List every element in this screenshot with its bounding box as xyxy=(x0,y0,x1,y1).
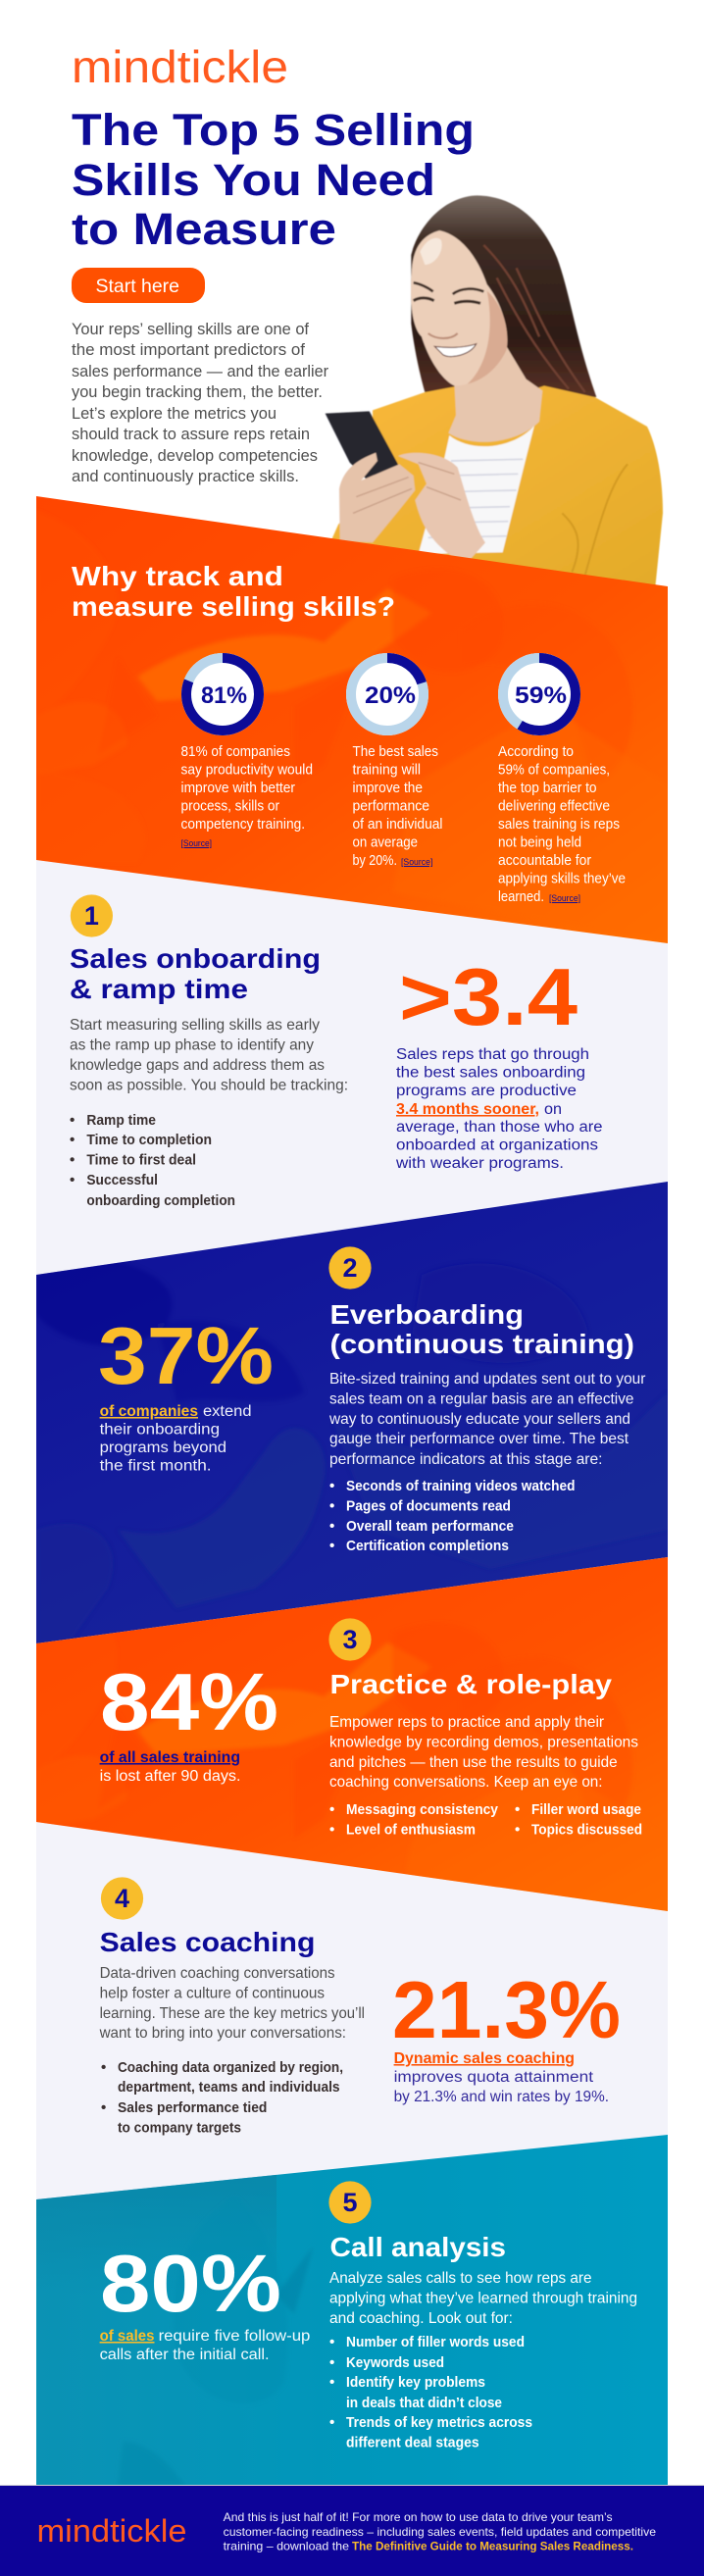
metric list: coaching: Sales performance tied xyxy=(118,2099,267,2116)
metric list: everboarding: Overall team performance xyxy=(346,1518,514,1535)
heading: sales onboarding: Sales onboarding xyxy=(70,943,321,974)
stat text: 80% xyxy=(100,2328,310,2363)
jacket xyxy=(331,385,663,586)
badge: 5: 5 xyxy=(342,2188,358,2217)
metric list: onboarding: • xyxy=(70,1172,75,1188)
stat text: months sooner: 3.4 months sooner, xyxy=(396,1101,539,1118)
badge: 1 xyxy=(71,894,113,937)
body text: coaching: Data-driven coaching conversations xyxy=(100,1965,335,1982)
stat text: months sooner: onboarded at organizations xyxy=(396,1137,598,1153)
stat text: 84%: of all sales training xyxy=(100,1749,240,1766)
metric list: everboarding: Pages of documents read xyxy=(346,1498,511,1514)
metric list: practice: Topics discussed xyxy=(531,1822,642,1838)
hair highlights xyxy=(483,245,585,392)
intro text: should track to assure reps retain xyxy=(72,426,310,443)
phone xyxy=(326,411,404,488)
stat text: 21.3%: by 21.3% and win rates by 19%. xyxy=(394,2089,609,2105)
panel: 3 practice and role-play xyxy=(36,1557,668,1911)
badge: 1: 1 xyxy=(84,901,99,931)
panel: page background xyxy=(36,588,668,2255)
metric list: onboarding: • xyxy=(70,1112,75,1129)
stat text: 81%: improve with better xyxy=(180,780,295,796)
stat text: 81%: [Source] xyxy=(180,838,212,849)
metric list: coaching: Coaching data organized by region, xyxy=(118,2059,343,2076)
stat text: 20%: of an individual xyxy=(353,816,443,833)
stat text: 59%: applying skills they’ve xyxy=(498,871,626,886)
intro text xyxy=(72,321,328,485)
body text: onboarding: as the ramp up phase to identify any xyxy=(70,1037,314,1053)
body text: coaching: learning. These are the key metrics you’ll xyxy=(100,2005,365,2022)
donut: 20% xyxy=(346,653,428,735)
badge: 2 xyxy=(328,1246,372,1289)
intro text: sales performance — and the earlier xyxy=(72,363,328,380)
big stat: 3.4: >3.4 xyxy=(399,951,578,1042)
body text: practice: coaching conversations. Keep an eye on: xyxy=(329,1774,602,1791)
badge: 5 xyxy=(328,2181,372,2224)
metric list: practice: Messaging consistency xyxy=(346,1801,499,1818)
body text: practice: and pitches — then use the results to guide xyxy=(329,1754,618,1771)
heading: everboarding: Everboarding xyxy=(329,1299,524,1330)
shirt xyxy=(419,426,534,554)
left hand xyxy=(339,453,415,542)
metric list: onboarding: • xyxy=(70,1132,75,1148)
heading: sales coaching: Sales coaching xyxy=(100,1927,315,1957)
stat text: 21.3% xyxy=(394,2050,609,2105)
donut: 59%: 59% xyxy=(515,682,567,709)
metric list: everboarding: • xyxy=(329,1498,334,1514)
body text: coaching xyxy=(99,1965,365,2042)
intro text: you begin tracking them, the better. xyxy=(72,383,323,401)
metric list: call analysis: Trends of key metrics across xyxy=(346,2414,532,2431)
title xyxy=(72,105,475,254)
stat text: 80%: require five follow-up xyxy=(159,2328,310,2345)
stat text: 81%: 81% of companies xyxy=(180,743,290,760)
donut: 59% xyxy=(498,653,580,735)
body text: everboarding: sales team on a regular basis are an effective xyxy=(329,1390,634,1408)
metric list: onboarding: Successful xyxy=(86,1172,158,1188)
panel: why track and measure xyxy=(36,496,668,943)
heading: sales onboarding: & ramp time xyxy=(70,974,248,1004)
heading: why track: Why track and xyxy=(72,561,283,591)
stat text: 37% xyxy=(100,1403,251,1475)
body text: call analysis xyxy=(329,2270,637,2327)
body text: practice: Empower reps to practice and apply their xyxy=(329,1714,605,1731)
hair xyxy=(411,195,596,397)
footer xyxy=(0,2485,704,2576)
stat text: 59%: 59% of companies, xyxy=(498,761,610,779)
metric list: call analysis: Number of filler words used xyxy=(346,2334,525,2350)
finger lines xyxy=(353,463,461,513)
heading: why track xyxy=(72,561,395,622)
metric list: everboarding: Seconds of training videos watched xyxy=(346,1478,575,1494)
big stat: 80%: 80% xyxy=(100,2238,281,2329)
stat text: months sooner: programs are productive xyxy=(396,1083,577,1099)
metric list: call analysis: • xyxy=(329,2374,334,2391)
metric list: onboarding: Time to completion xyxy=(86,1132,212,1148)
intro text: Let’s explore the metrics you xyxy=(72,405,277,423)
stat text: 59%: According to xyxy=(498,743,574,760)
metric list: coaching: to company targets xyxy=(118,2120,241,2136)
stat text: 20%: by 20%. xyxy=(353,852,397,869)
donut: 20%: 20% xyxy=(365,682,416,709)
heading: practice: Practice & role-play xyxy=(329,1669,613,1699)
stat text: 59%: learned. xyxy=(498,888,544,905)
metric list: practice: • xyxy=(515,1822,520,1838)
metric list: coaching: • xyxy=(101,2059,106,2076)
stat text: 20%: on average xyxy=(353,833,418,851)
stat text: 81% xyxy=(180,743,313,849)
metric list: call analysis: in deals that didn’t close xyxy=(346,2395,502,2411)
body text: call analysis: applying what they’ve learned through training xyxy=(329,2291,637,2306)
metric list: call analysis: • xyxy=(329,2334,334,2350)
metric list: everboarding: • xyxy=(329,1478,334,1494)
body text: everboarding: way to continuously educate your sellers and xyxy=(328,1411,630,1428)
stat text: 20%: performance xyxy=(353,798,429,814)
stat text: 37%: their onboarding xyxy=(100,1422,220,1438)
logo: mindtickle: mindtickle xyxy=(72,41,288,92)
metric list: practice: • xyxy=(515,1801,520,1818)
right hand xyxy=(398,453,485,559)
body text: coaching: help foster a culture of continuous xyxy=(100,1985,325,2002)
footer call to action xyxy=(224,2510,656,2553)
metric list: practice: Level of enthusiasm xyxy=(346,1822,476,1838)
metric list: onboarding: Ramp time xyxy=(86,1112,156,1129)
title: to Measure xyxy=(72,204,336,254)
body text: everboarding: Bite-sized training and updates sent out to your xyxy=(329,1371,646,1388)
badge: 3: 3 xyxy=(342,1625,358,1654)
metric list: call analysis xyxy=(329,2334,532,2451)
photo: woman using smartphone xyxy=(326,195,663,586)
stat text: 59%: not being held xyxy=(498,833,581,851)
metric list: onboarding: • xyxy=(70,1151,75,1169)
heading: sales onboarding xyxy=(70,943,321,1004)
metric list: practice xyxy=(329,1801,642,1838)
face xyxy=(411,230,507,385)
metric list: practice: • xyxy=(329,1822,334,1838)
stat text: 80%: calls after the initial call. xyxy=(100,2347,270,2363)
body text: onboarding: soon as possible. You should be tracking: xyxy=(70,1077,348,1094)
footer call to action: The Definitive Guide to Measuring Sales Readiness. xyxy=(352,2540,633,2553)
footer logo: mindtickle xyxy=(37,2513,186,2549)
body text: call analysis: Analyze sales calls to see how reps are xyxy=(329,2270,592,2287)
body text: practice xyxy=(329,1714,638,1791)
stat text: 59%: delivering effective xyxy=(498,798,610,814)
metric list: call analysis: • xyxy=(329,2414,334,2431)
big stat: 37%: 37% xyxy=(98,1310,274,1401)
footer call to action: customer-facing readiness – including sales events, field updates and competitive xyxy=(224,2525,656,2539)
body text: everboarding: performance indicators at this stage are: xyxy=(329,1451,602,1468)
stat text: 20%: [Source] xyxy=(401,857,432,868)
intro text: Your reps’ selling skills are one of xyxy=(72,321,309,338)
stat text: 81%: competency training. xyxy=(180,816,305,833)
metric list: call analysis: Identify key problems xyxy=(346,2374,485,2391)
metric list: onboarding: Time to first deal xyxy=(86,1151,196,1169)
big stat: 21.3%: 21.3% xyxy=(392,1964,621,2055)
intro text: and continuously practice skills. xyxy=(72,468,299,485)
stat text: 37%: of companies xyxy=(100,1403,198,1420)
metric list: call analysis: different deal stages xyxy=(346,2434,479,2451)
stat text: months sooner: average, than those who are xyxy=(396,1119,602,1136)
metric list: coaching xyxy=(101,2059,343,2136)
stat text: months sooner: with weaker programs. xyxy=(395,1155,564,1172)
stat text: 20%: improve the xyxy=(353,780,423,796)
panel: 5 call analysis xyxy=(36,2135,668,2486)
footer call to action: And this is just half of it! For more on how to use data to drive your team’s xyxy=(224,2510,613,2524)
stat text: 21.3%: improves quota attainment xyxy=(394,2069,594,2086)
stat text: months sooner: on xyxy=(544,1101,562,1118)
donut: 81%: 81% xyxy=(201,682,247,709)
metric list: practice: • xyxy=(329,1801,334,1818)
stat text: 59%: [Source] xyxy=(549,893,580,904)
metric list: onboarding xyxy=(70,1112,235,1209)
stat text: 59%: accountable for xyxy=(498,852,591,869)
stat text: 37%: extend xyxy=(203,1403,251,1420)
stat text: 20%: training will xyxy=(353,761,421,779)
stat text: 20%: The best sales xyxy=(353,743,438,760)
button: start here: Start here xyxy=(96,276,179,297)
heading: everboarding: (continuous training) xyxy=(329,1329,634,1359)
stat text: 21.3%: Dynamic sales coaching xyxy=(394,2050,575,2067)
stat text: 84% xyxy=(100,1749,240,1785)
heading: everboarding xyxy=(329,1299,634,1359)
panel: 1 sales onboarding xyxy=(70,894,602,1209)
metric list: practice: Filler word usage xyxy=(531,1801,641,1818)
metric list: coaching: • xyxy=(101,2099,106,2116)
big stat: 84%: 84% xyxy=(100,1656,278,1747)
badge: 4: 4 xyxy=(115,1884,129,1913)
title: Skills You Need xyxy=(72,155,435,205)
metric list: everboarding: • xyxy=(329,1518,334,1535)
donut: 81% xyxy=(181,653,264,735)
intro text: the most important predictors of xyxy=(72,341,305,359)
body text: practice: knowledge by recording demos, presentations xyxy=(329,1734,638,1751)
body text: onboarding xyxy=(70,1017,348,1094)
panel: 2 everboarding xyxy=(36,1182,668,1643)
metric list: everboarding xyxy=(329,1478,575,1554)
jacket shadow fold xyxy=(562,464,628,576)
stat text: 80%: of sales xyxy=(100,2328,155,2345)
stat text: months sooner: the best sales onboarding xyxy=(396,1065,585,1081)
body text: call analysis: and coaching. Look out for: xyxy=(329,2310,513,2327)
stat text: 59%: sales training is reps xyxy=(498,816,620,833)
metric list: coaching: department, teams and individuals xyxy=(118,2079,340,2096)
heading: why track: measure selling skills? xyxy=(72,591,395,622)
metric list: onboarding: onboarding completion xyxy=(86,1192,235,1209)
stat text: months sooner: Sales reps that go through xyxy=(396,1046,589,1063)
metric list: call analysis: Keywords used xyxy=(346,2354,444,2371)
stat text: 81%: process, skills or xyxy=(180,798,279,814)
badge: 2: 2 xyxy=(342,1253,358,1283)
stat text: 20% xyxy=(353,743,443,869)
stat text: 84%: is lost after 90 days. xyxy=(100,1768,240,1785)
title: The Top 5 Selling xyxy=(72,105,475,155)
body text: coaching: want to bring into your conversations: xyxy=(99,2025,346,2042)
metric list: everboarding: • xyxy=(329,1538,334,1554)
body text: onboarding: knowledge gaps and address them as xyxy=(70,1057,325,1074)
badge: 4 xyxy=(101,1877,143,1920)
panel: 4 sales coaching xyxy=(99,1877,621,2136)
body text: everboarding: gauge their performance over time. The best xyxy=(329,1431,629,1447)
intro text: knowledge, develop competencies xyxy=(72,447,318,465)
heading: call analysis: Call analysis xyxy=(329,2232,506,2262)
stat text: 37%: programs beyond xyxy=(100,1440,226,1456)
metric list: call analysis: • xyxy=(329,2354,334,2371)
badge: 3 xyxy=(328,1618,372,1661)
stat text: 81%: say productivity would xyxy=(180,761,313,779)
body text: everboarding xyxy=(328,1371,646,1468)
button: start here xyxy=(72,268,205,303)
stat text: 59% xyxy=(498,743,626,905)
stat text: 59%: the top barrier to xyxy=(498,780,596,796)
neck xyxy=(448,346,542,442)
metric list: everboarding: Certification completions xyxy=(346,1538,509,1554)
stat text: months sooner xyxy=(395,1046,602,1172)
footer call to action: training – download the xyxy=(224,2540,349,2553)
stat text: 37%: the first month. xyxy=(100,1457,212,1475)
body text: onboarding: Start measuring selling skills as early xyxy=(70,1017,320,1034)
